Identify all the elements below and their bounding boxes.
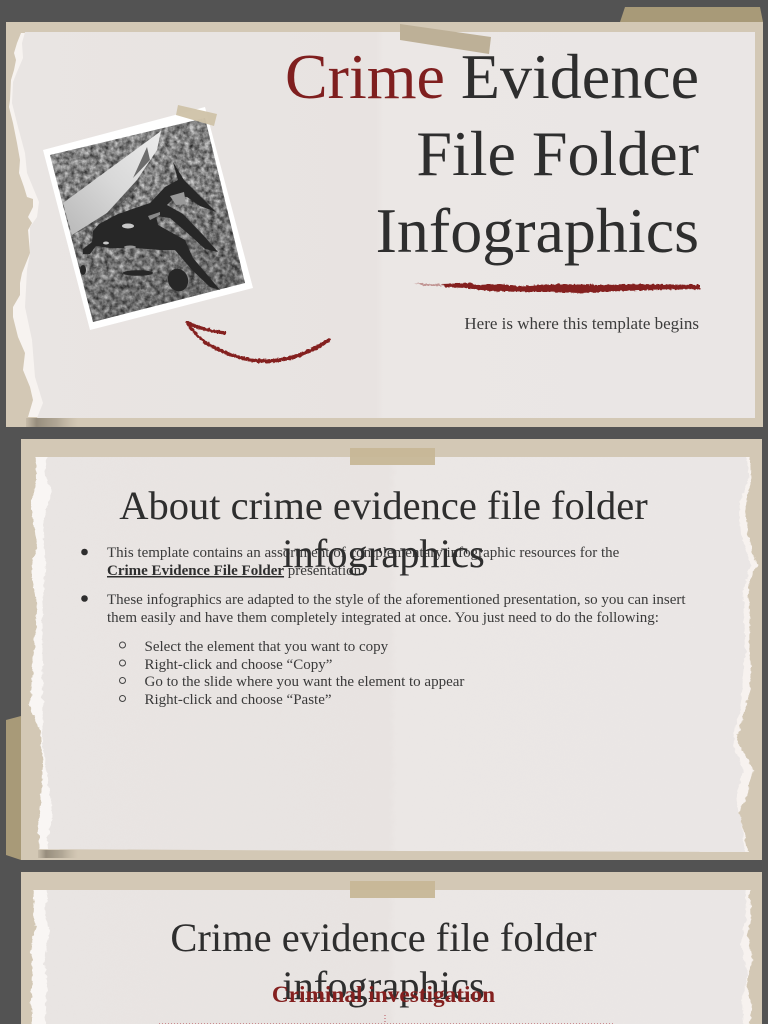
sub-list: Right-click and choose “Copy”: [144, 657, 332, 673]
sub-list: [120, 639, 464, 708]
paper sheet: [12, 32, 755, 418]
heading: [170, 915, 597, 1008]
sub-list: Select the element that you want to copy: [144, 639, 389, 655]
tape on folder: [400, 24, 491, 54]
folder side tab: [6, 716, 21, 860]
title: Infographics: [376, 195, 699, 266]
chart title: Criminal investigation: [272, 982, 495, 1008]
slide 1: title folder: [6, 7, 763, 427]
title: [285, 41, 699, 266]
sub-list: Go to the slide where you want the element to appear: [144, 674, 464, 690]
folder back: [21, 439, 762, 860]
torn white edges: [30, 450, 60, 865]
heading: About crime evidence file folder: [119, 483, 648, 528]
photo tape: [176, 105, 217, 126]
body text: [81, 545, 686, 708]
sub-list: Right-click and choose “Paste”: [144, 692, 332, 708]
tape: [350, 881, 435, 898]
org chart connectors: [159, 1015, 615, 1024]
bullet 2: [81, 592, 686, 626]
paper sheet: [44, 880, 747, 1024]
title: File Folder: [416, 118, 699, 189]
heading: Crime evidence file folder: [170, 915, 597, 960]
heading: infographics: [282, 531, 485, 576]
hand-drawn red arrow: [187, 322, 329, 361]
folder back: [21, 872, 762, 1024]
photo: knife and blood: [43, 105, 253, 330]
knife blade: [63, 131, 161, 235]
bullet 1: This template contains an assortment of complementary infographic resources for the: [107, 545, 620, 561]
title: Crime Evidence: [285, 41, 699, 112]
torn edges and paper: [30, 450, 757, 865]
torn edges and paper: [31, 880, 752, 1024]
bullet 2: These infographics are adapted to the style of the aforementioned presentation, so you can insert: [107, 592, 686, 608]
torn white edges: [30, 890, 50, 1024]
bullet 2: them easily and have them completely integrated at once. You just need to do the following:: [107, 610, 659, 626]
bullet 1: Crime Evidence File Folder presentation.: [107, 563, 365, 579]
brush underline: [413, 283, 700, 293]
subtitle: Here is where this template begins: [464, 314, 699, 333]
blood stain: [80, 162, 220, 294]
heading: [119, 483, 648, 576]
folder tab: [620, 7, 763, 22]
heading: infographics: [282, 963, 485, 1008]
paper sheet: [42, 450, 751, 865]
photo frame: [43, 107, 253, 330]
tape: [350, 448, 435, 465]
slide 2: about folder: [6, 439, 762, 865]
slide 3: infographic folder: [21, 872, 762, 1024]
folder back: [6, 22, 763, 427]
photo surface: [50, 118, 245, 322]
bullet 1: [81, 545, 620, 579]
torn white paper edge: [9, 33, 60, 417]
